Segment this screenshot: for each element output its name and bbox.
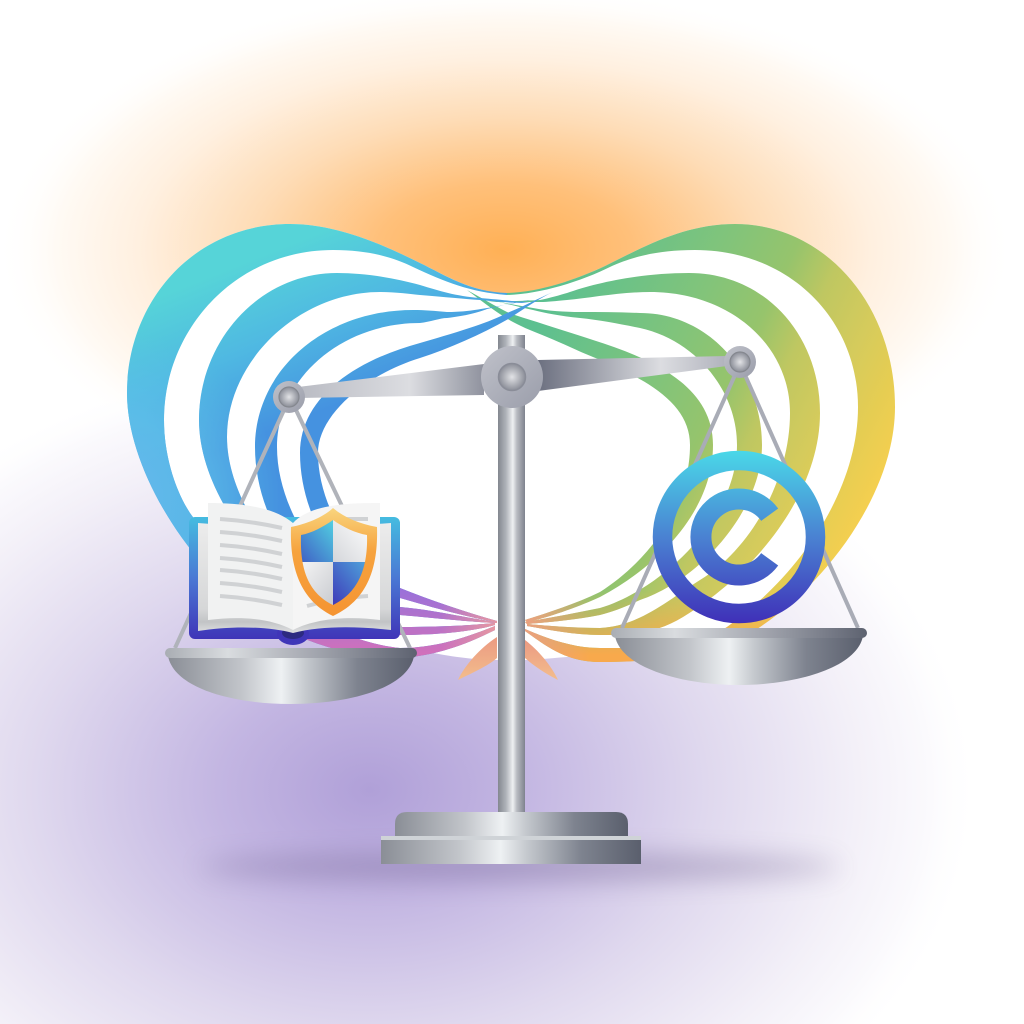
scale base bbox=[381, 812, 641, 864]
scale post bbox=[498, 335, 525, 815]
right ribbons: green to yellow to orange bbox=[467, 224, 895, 662]
ground shadow bbox=[200, 854, 840, 880]
right pan hangers bbox=[622, 375, 858, 628]
center hub bbox=[481, 346, 543, 408]
icon: copyright symbol bbox=[662, 460, 816, 614]
left beam arm bbox=[298, 364, 484, 398]
right page text lines bbox=[307, 519, 368, 606]
shield bbox=[291, 508, 377, 616]
white heart-shaped interior bbox=[127, 224, 895, 660]
book spine knob bbox=[277, 623, 309, 645]
right beam arm bbox=[538, 356, 727, 391]
left page bbox=[208, 503, 293, 630]
right pivot knob bbox=[724, 346, 756, 378]
back pages bbox=[198, 523, 391, 633]
left pan bbox=[165, 648, 417, 704]
book cover bbox=[189, 517, 400, 639]
left pan hangers bbox=[175, 410, 410, 648]
left page text lines bbox=[220, 519, 282, 605]
left pivot knob bbox=[273, 381, 305, 413]
left ribbons: teal to blue to purple bbox=[127, 224, 552, 656]
icon: open book with shield bbox=[189, 503, 400, 645]
right pan bbox=[611, 628, 867, 685]
lower ribbon petals bbox=[458, 637, 558, 680]
right page bbox=[293, 503, 380, 630]
